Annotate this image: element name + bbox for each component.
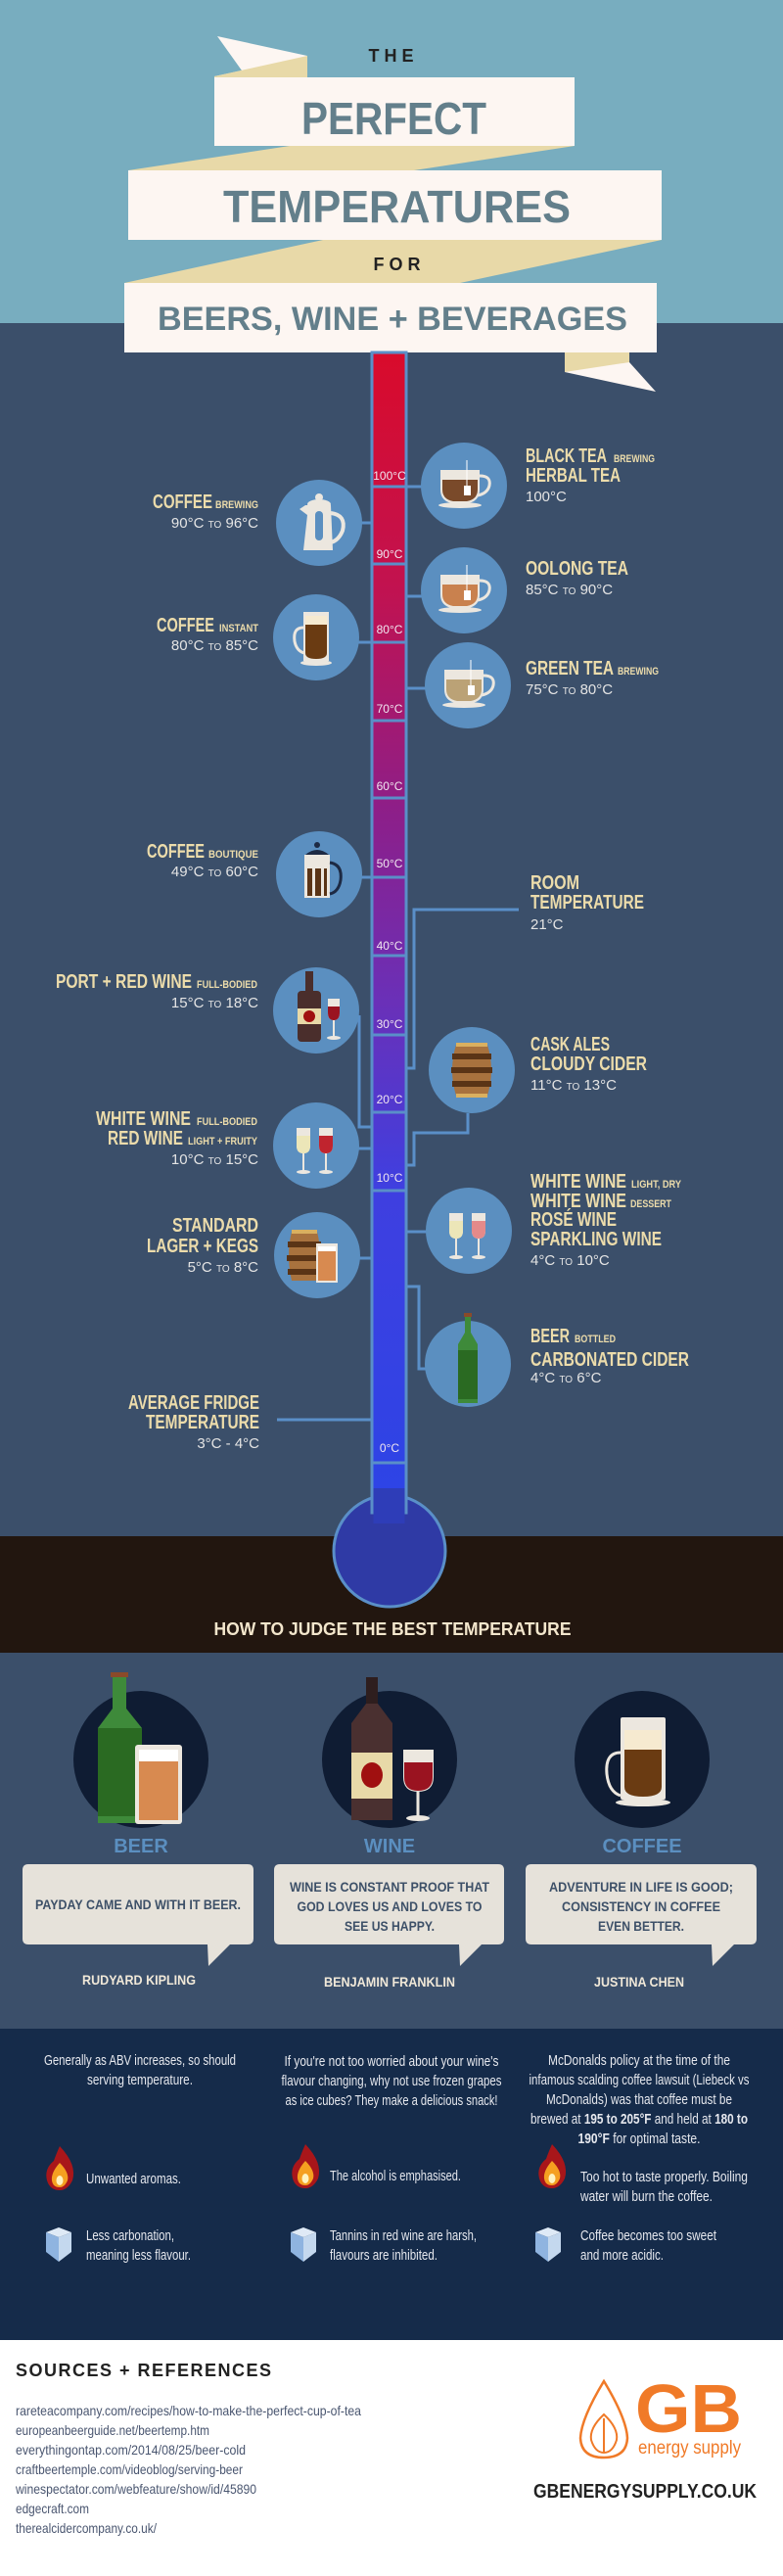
right labels: CASK ALES (530, 1034, 610, 1055)
panel: wine: WINE (364, 1836, 415, 1857)
thermometer: 100°C (373, 469, 406, 483)
left labels: 10°C TO 15°C (171, 1151, 258, 1168)
text: effects: meaning less flavour. (86, 2248, 191, 2264)
left labels: TEMPERATURE (146, 1412, 259, 1433)
left labels: RED WINE (108, 1128, 183, 1149)
logo: GBENERGYSUPPLY.CO.UK (533, 2481, 757, 2503)
text: effects: Unwanted aromas. (86, 2172, 181, 2187)
logo: GB (635, 2370, 742, 2447)
right labels: TEMPERATURE (530, 892, 644, 913)
thermometer: 10°C (377, 1171, 403, 1185)
thermometer: 20°C (377, 1093, 403, 1106)
right labels: 100°C (526, 489, 567, 505)
panel: wine: GOD LOVES US AND LOVES TO (298, 1898, 483, 1914)
title ribbon: FOR (374, 255, 425, 274)
left labels: COFFEE (153, 492, 212, 513)
right labels: BEER (530, 1326, 570, 1347)
text block: facts (44, 2053, 750, 2147)
title ribbon: PERFECT (301, 93, 486, 144)
text: effects: Too hot to taste properly. Boiling (580, 2170, 748, 2185)
logo (533, 2370, 757, 2503)
left labels: LIGHT + FRUITY (188, 1136, 258, 1147)
left labels: FULL-BODIED (197, 979, 257, 991)
right labels: 21°C (530, 916, 564, 933)
icon: white + rose wine glasses (426, 1188, 512, 1274)
panel: coffee: ADVENTURE IN LIFE IS GOOD; (549, 1879, 733, 1895)
right labels: BLACK TEA (526, 445, 607, 467)
right labels: HERBAL TEA (526, 465, 621, 487)
text: effects (86, 2169, 748, 2264)
icon: port + red wine (273, 967, 359, 1054)
title ribbon: THE (368, 46, 419, 66)
text block: facts: McDonalds) was that coffee must be (546, 2092, 732, 2108)
heading: how to judge: HOW TO JUDGE THE BEST TEMPERATURE (213, 1619, 572, 1639)
sources: craftbeertemple.com/videoblog/serving-beer (16, 2461, 243, 2477)
sources: therealcidercompany.co.uk/ (16, 2520, 157, 2536)
icons: ice cubes (46, 2227, 561, 2262)
right labels: LIGHT, DRY (631, 1179, 682, 1191)
thermometer: 30°C (377, 1017, 403, 1031)
sources: winespectator.com/webfeature/show/id/45890 (15, 2481, 256, 2497)
right labels: SPARKLING WINE (530, 1229, 662, 1250)
right labels: 75°C TO 80°C (526, 681, 613, 698)
thermometer: 50°C (377, 857, 403, 870)
text block: facts: as ice cubes? They make a delicious snack! (286, 2093, 497, 2109)
right labels: WHITE WINE (530, 1191, 626, 1212)
right labels: OOLONG TEA (526, 558, 628, 580)
title ribbon (124, 36, 662, 392)
left labels: 49°C TO 60°C (171, 864, 258, 880)
left labels: 3°C - 4°C (197, 1435, 259, 1452)
panel: beer: BEER (114, 1836, 168, 1857)
thermometer: 80°C (377, 623, 403, 636)
panel: coffee: COFFEE (602, 1836, 682, 1857)
text block: facts: Generally as ABV increases, so should (44, 2053, 236, 2069)
sources: europeanbeerguide.net/beertemp.htm (16, 2422, 209, 2438)
text block: facts: flavour changing, why not use frozen grapes (282, 2074, 501, 2089)
connector lines (277, 487, 519, 1420)
text block: facts: If you're not too worried about your wine's (284, 2054, 499, 2070)
right labels: WHITE WINE (530, 1171, 626, 1193)
text: effects: Tannins in red wine are harsh, (330, 2228, 477, 2244)
left labels: 80°C TO 85°C (171, 637, 258, 654)
left labels: PORT + RED WINE (56, 971, 192, 993)
panel: wine (274, 1677, 504, 1990)
thermometer (334, 352, 445, 1607)
icon: instant coffee (273, 594, 359, 680)
panel: wine: SEE US HAPPY. (345, 1918, 435, 1934)
right labels: CARBONATED CIDER (530, 1349, 689, 1371)
left labels: INSTANT (219, 623, 258, 634)
left labels: COFFEE (157, 615, 214, 636)
right labels: BOTTLED (575, 1334, 616, 1345)
right labels: 4°C TO 10°C (530, 1252, 610, 1269)
left labels: COFFEE (147, 841, 205, 863)
left labels: BOUTIQUE (208, 849, 258, 861)
sources: everythingontap.com/2014/08/25/beer-cold (16, 2442, 246, 2458)
left labels: 90°C TO 96°C (171, 515, 258, 532)
text block: facts: serving temperature. (87, 2073, 193, 2088)
left labels: BREWING (215, 499, 258, 511)
left labels: 5°C TO 8°C (188, 1259, 258, 1276)
left labels: STANDARD (172, 1215, 258, 1237)
thermometer: 70°C (377, 702, 403, 716)
right labels: 4°C TO 6°C (530, 1370, 602, 1386)
logo: energy supply (638, 2438, 741, 2459)
icon: green tea (425, 642, 511, 728)
right labels: CLOUDY CIDER (530, 1054, 647, 1075)
text: effects: The alcohol is emphasised. (330, 2169, 461, 2184)
text: effects: Less carbonation, (86, 2228, 174, 2244)
icon: lager keg + pint (274, 1212, 360, 1298)
right labels: 11°C TO 13°C (530, 1077, 617, 1094)
text: effects: and more acidic. (580, 2248, 664, 2264)
thermometer: 60°C (377, 779, 403, 793)
left labels: WHITE WINE (96, 1108, 191, 1130)
left labels (56, 492, 259, 1452)
panel: beer (23, 1672, 253, 1988)
text: effects: flavours are inhibited. (330, 2248, 438, 2264)
right labels (526, 445, 689, 1386)
panel: coffee (526, 1691, 757, 1990)
title ribbon: TEMPERATURES (223, 181, 571, 232)
panel: beer: PAYDAY CAME AND WITH IT BEER. (35, 1897, 241, 1912)
left labels: AVERAGE FRIDGE (128, 1392, 259, 1414)
icons: flames (46, 2144, 566, 2190)
icon: french press (276, 831, 362, 917)
text block: facts: 190°F for optimal taste. (577, 2131, 701, 2147)
right labels: GREEN TEA (526, 658, 614, 679)
left labels: 15°C TO 18°C (171, 995, 258, 1011)
panel: beer: RUDYARD KIPLING (82, 1972, 196, 1988)
text block: facts: brewed at 195 to 205°F and held at 180 to (530, 2112, 748, 2128)
sources (15, 2361, 361, 2536)
icon: black tea (421, 443, 507, 529)
icon: oolong tea (421, 547, 507, 633)
text block: facts: McDonalds policy at the time of the (548, 2053, 730, 2069)
thermometer: 40°C (377, 939, 403, 953)
right labels: DESSERT (630, 1198, 671, 1210)
sources: rareteacompany.com/recipes/how-to-make-the-perfect-cup-of-tea (16, 2403, 361, 2418)
title ribbon: BEERS, WINE + BEVERAGES (158, 301, 627, 338)
text: effects: water will burn the coffee. (579, 2189, 713, 2205)
panel: wine: BENJAMIN FRANKLIN (324, 1974, 455, 1990)
right labels: 85°C TO 90°C (526, 582, 613, 598)
right labels: BREWING (614, 453, 655, 465)
text: effects: Coffee becomes too sweet (580, 2228, 716, 2244)
right labels: ROOM (530, 872, 579, 894)
left labels: LAGER + KEGS (147, 1236, 258, 1257)
right labels: BREWING (618, 666, 659, 678)
icon: white + red wine glasses (273, 1102, 359, 1189)
panel: coffee: CONSISTENCY IN COFFEE (562, 1898, 720, 1914)
right labels: ROSÉ WINE (530, 1208, 617, 1231)
panel: coffee: JUSTINA CHEN (594, 1974, 684, 1990)
sources: SOURCES + REFERENCES (16, 2361, 273, 2380)
icon: coffee pot (276, 480, 362, 566)
icon: green beer bottle (425, 1313, 511, 1407)
panel: coffee: EVEN BETTER. (598, 1918, 684, 1934)
left labels: FULL-BODIED (197, 1116, 257, 1128)
thermometer: 0°C (380, 1441, 399, 1455)
thermometer: 90°C (377, 547, 403, 561)
panel: wine: WINE IS CONSTANT PROOF THAT (290, 1879, 489, 1895)
icon: cask ale barrel (429, 1027, 515, 1113)
sources: edgecraft.com (16, 2501, 89, 2516)
